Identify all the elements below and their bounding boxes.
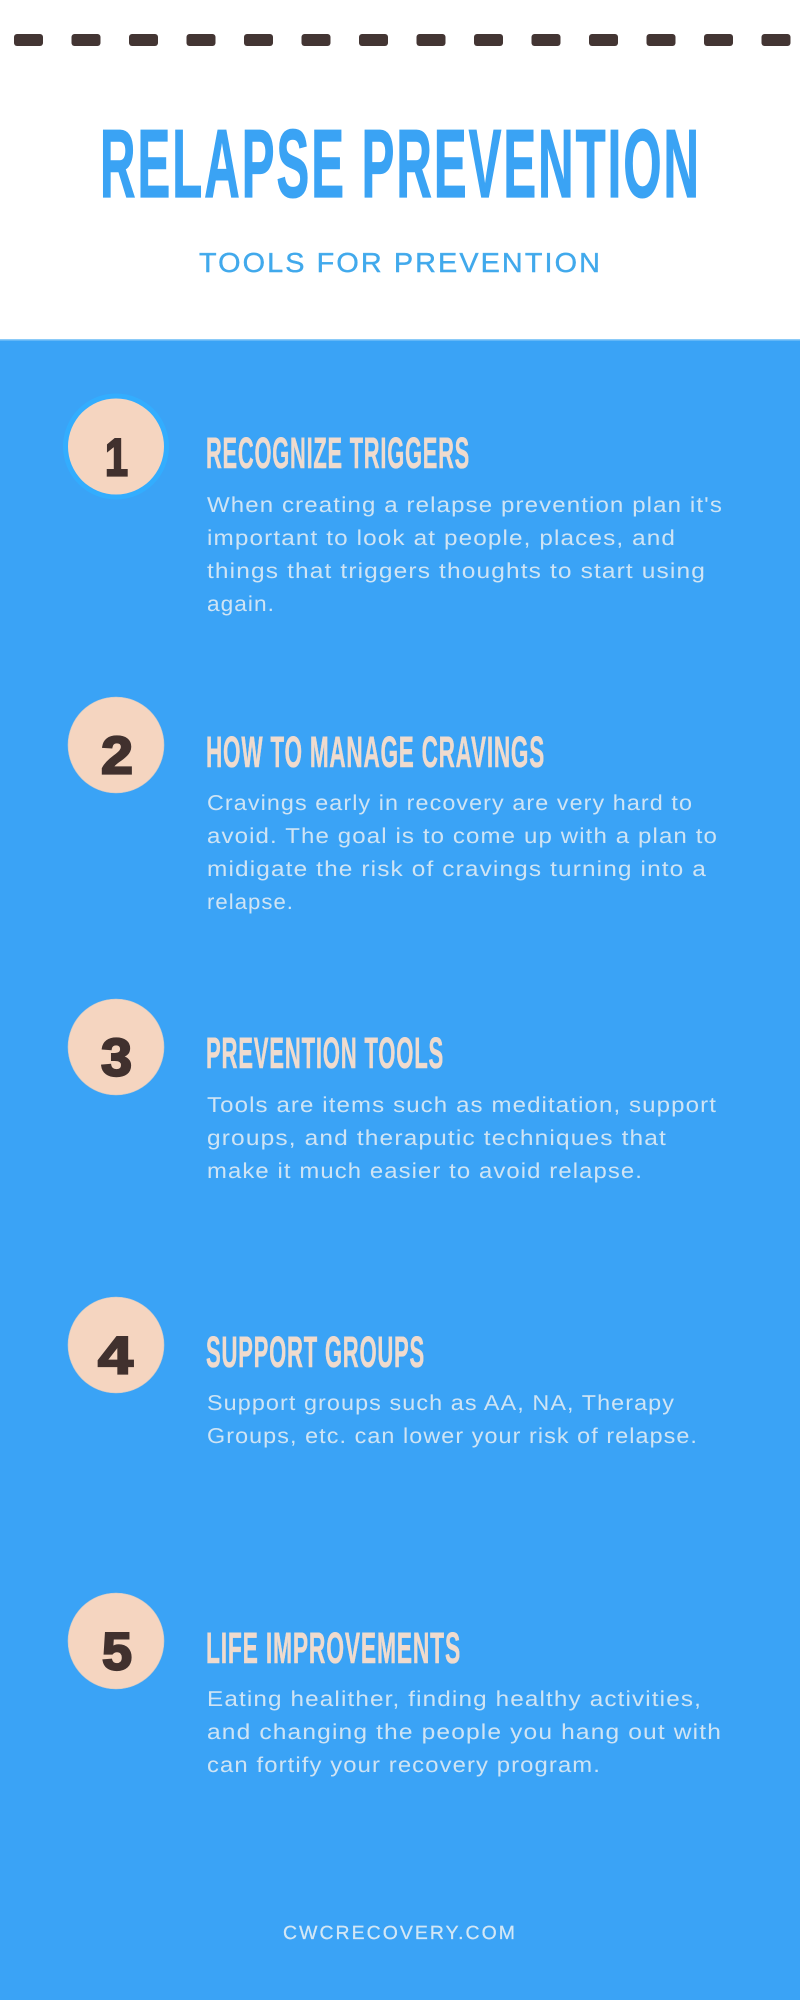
number badge 2 (68, 697, 164, 793)
number badge 5 (68, 1593, 164, 1689)
step 2: how to manage cravings (68, 697, 718, 914)
number badge 4 (68, 1297, 164, 1393)
body text 1: again. (207, 592, 275, 616)
step 3: prevention tools (68, 999, 717, 1183)
header panel (0, 0, 800, 340)
number badge 3: 3 (101, 1028, 132, 1088)
number badge 1: 1 (105, 428, 128, 488)
body text 5: Eating healither, finding healthy activities, (207, 1687, 702, 1711)
body text 5: can fortify your recovery program. (207, 1753, 601, 1777)
step 4: support groups (68, 1297, 698, 1448)
step 1: recognize triggers: RECOGNIZE TRIGGERS (206, 429, 470, 478)
body text 4: Groups, etc. can lower your risk of relapse. (207, 1424, 698, 1448)
number badge 4: 4 (98, 1326, 134, 1386)
number badge 1 (63, 394, 169, 500)
step 5: life improvements (68, 1593, 722, 1777)
body text 1: When creating a relapse prevention plan it's (207, 493, 723, 517)
footer url: CWCRECOVERY.COM (283, 1923, 517, 1944)
body text 1 (207, 493, 723, 616)
body text 4 (207, 1391, 698, 1448)
body text 3: groups, and theraputic techniques that (207, 1126, 667, 1150)
body text 2: avoid. The goal is to come up with a plan to (207, 824, 718, 848)
body text 2 (207, 791, 718, 914)
heading 3: PREVENTION TOOLS (206, 1029, 444, 1078)
subtitle: TOOLS FOR PREVENTION (199, 247, 602, 278)
body text 4: Support groups such as AA, NA, Therapy (207, 1391, 675, 1415)
body text 2: midigate the risk of cravings turning into a (207, 857, 707, 881)
body text 5 (207, 1687, 722, 1777)
body text 2: Cravings early in recovery are very hard to (207, 791, 693, 815)
number badge 2: 2 (101, 726, 133, 786)
body text 3 (207, 1093, 717, 1183)
dashed strip (14, 34, 790, 46)
number badge 3 (68, 999, 164, 1095)
body text 3: make it much easier to avoid relapse. (207, 1159, 643, 1183)
body text 1: important to look at people, places, and (207, 526, 676, 550)
heading 4: SUPPORT GROUPS (206, 1328, 425, 1377)
body text 1: things that triggers thoughts to start using (207, 559, 706, 583)
body text 5: and changing the people you hang out with (207, 1720, 722, 1744)
number badge 5: 5 (102, 1622, 132, 1682)
step 1: recognize triggers (63, 394, 723, 616)
body text 3: Tools are items such as meditation, support (207, 1093, 717, 1117)
body text 2: relapse. (207, 890, 294, 914)
heading 5: LIFE IMPROVEMENTS (206, 1624, 461, 1673)
